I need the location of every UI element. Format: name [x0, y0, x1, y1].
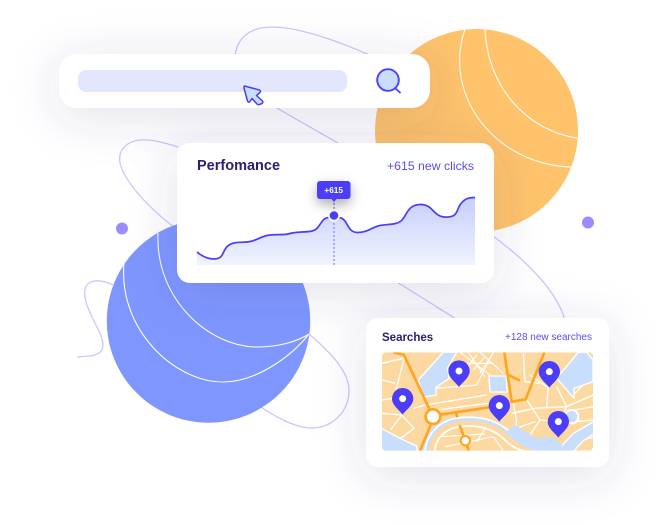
search bar panel — [59, 54, 430, 108]
new clicks label: +615 new clicks — [387, 159, 474, 173]
water — [381, 352, 594, 451]
new searches label: +128 new searches — [505, 332, 592, 343]
white streets east — [512, 353, 593, 440]
panel: searches — [366, 318, 609, 467]
icon: magnifier — [377, 69, 400, 92]
pond — [565, 410, 578, 423]
heading: searches: Searches — [382, 332, 433, 344]
roundabouts — [426, 409, 440, 424]
accent dot right — [582, 216, 594, 228]
panel: performance — [177, 143, 494, 283]
tooltip +615 — [317, 181, 350, 202]
orange planet — [375, 29, 578, 232]
icon: cursor arrow — [244, 86, 263, 105]
dashed marker line — [333, 199, 335, 265]
infographic canvas — [46, 26, 628, 494]
search input field — [78, 70, 347, 92]
heading: performance: Perfomance — [197, 158, 280, 174]
white streets west — [382, 355, 488, 438]
blue planet — [107, 219, 310, 423]
south bank streets — [440, 427, 503, 451]
orbit lines — [77, 27, 565, 428]
map pins — [392, 360, 569, 438]
data point marker — [328, 210, 340, 222]
river — [422, 417, 567, 451]
area chart — [197, 198, 475, 265]
tooltip +615: +615 — [324, 185, 343, 195]
orange main roads — [393, 352, 544, 451]
white street grid north — [460, 352, 503, 385]
city map — [381, 352, 594, 452]
accent dot left — [116, 222, 128, 234]
